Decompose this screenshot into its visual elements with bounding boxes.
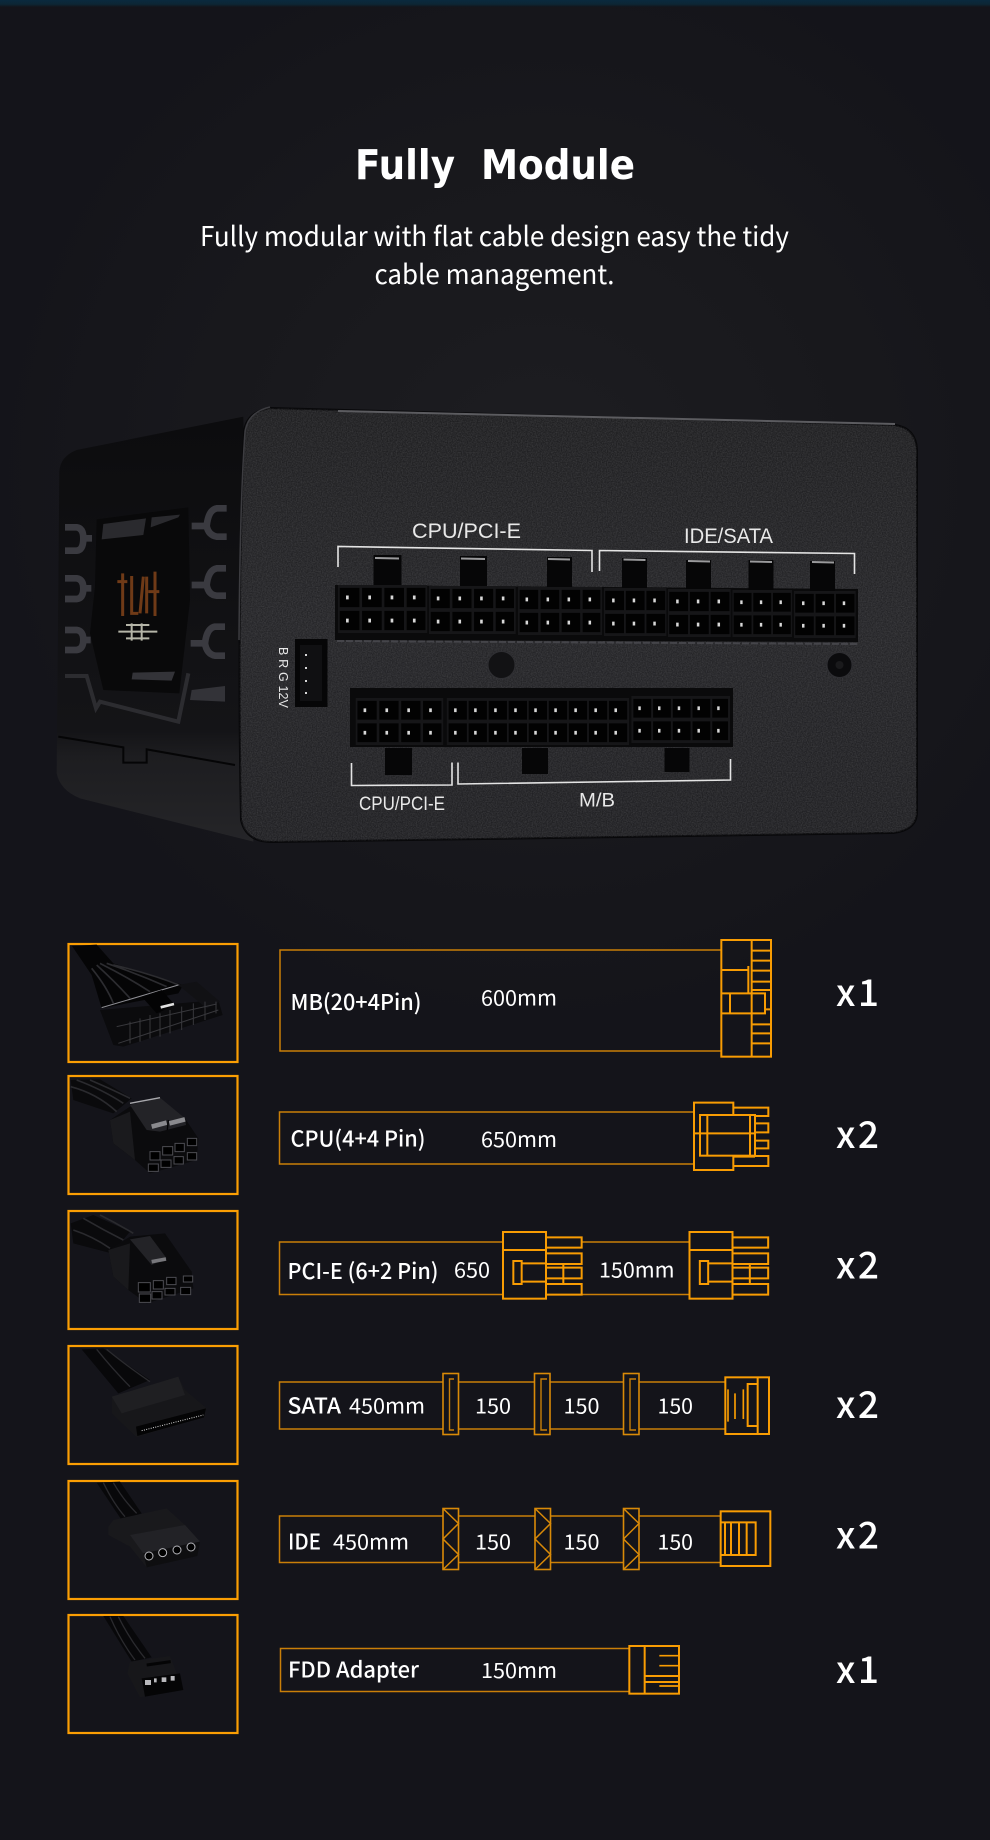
quantity: x 2 bbox=[836, 1506, 879, 1560]
quantity: x 1 bbox=[836, 1640, 879, 1694]
connector clip two bbox=[534, 1374, 550, 1434]
subtitle text: Fully modular with flat cable design easy the tidy bbox=[200, 215, 789, 254]
label: PCI-E (6+2 Pin) bbox=[288, 1254, 438, 1286]
cable outline bbox=[280, 1112, 693, 1164]
length: 450mm bbox=[333, 1526, 409, 1556]
cable outline bbox=[280, 1516, 721, 1562]
icon: product logo mark bbox=[117, 572, 159, 641]
label: M/B: M/B bbox=[579, 790, 615, 812]
length: first segment: 650 bbox=[454, 1254, 490, 1284]
thumbnail: IDE connector bbox=[68, 1481, 238, 1599]
connector clip one bbox=[443, 1374, 458, 1434]
top bracket lines bbox=[338, 546, 854, 574]
label: SATA bbox=[288, 1388, 341, 1420]
connector clip three bbox=[624, 1374, 639, 1434]
length: second segment: 150mm bbox=[599, 1254, 674, 1284]
icon: 6+2-pin connector one bbox=[503, 1232, 582, 1299]
cable outline bbox=[280, 950, 721, 1051]
label: B R G 12V: B R G 12V bbox=[276, 647, 290, 709]
row: CPU cable bbox=[68, 1076, 879, 1194]
icon: 8-pin connector bbox=[694, 1103, 768, 1170]
row: FDD adapter bbox=[68, 1615, 879, 1733]
connector clip one bbox=[443, 1508, 458, 1570]
label: MB(20+4Pin) bbox=[290, 985, 422, 1017]
length segment three: 150 bbox=[658, 1526, 693, 1556]
label: IDE/SATA: IDE/SATA bbox=[684, 525, 773, 548]
thumbnail: SATA connector bbox=[68, 1346, 238, 1464]
length segment two: 150 bbox=[564, 1526, 600, 1556]
icon: Molex end connector bbox=[721, 1511, 770, 1566]
cable outline bbox=[280, 1242, 689, 1294]
length segment one: 150 bbox=[475, 1526, 511, 1556]
label: CPU(4+4 Pin) bbox=[290, 1122, 426, 1154]
length segment one: 150 bbox=[475, 1390, 511, 1420]
thumbnail: MB connector bbox=[68, 944, 238, 1062]
label: IDE bbox=[288, 1524, 321, 1556]
quantity: x 2 bbox=[836, 1236, 879, 1290]
quantity: x 2 bbox=[836, 1105, 879, 1159]
product: power supply unit bbox=[57, 405, 920, 845]
subtitle text bbox=[200, 215, 789, 292]
bottom bracket lines bbox=[352, 759, 730, 786]
row: SATA cable bbox=[68, 1346, 879, 1464]
icon: FDD end connector bbox=[629, 1646, 679, 1694]
title: Fully Module bbox=[355, 141, 635, 189]
cable outline bbox=[280, 1382, 725, 1429]
side panel of PSU bbox=[57, 417, 253, 842]
RGB header bbox=[295, 639, 328, 707]
connector clip three bbox=[624, 1508, 639, 1570]
length: 650mm bbox=[481, 1124, 557, 1154]
length: 600mm bbox=[481, 982, 557, 1012]
row: MB cable bbox=[68, 940, 879, 1062]
front panel of PSU bbox=[236, 405, 920, 845]
quantity: x 2 bbox=[836, 1375, 879, 1429]
bottom connector row bbox=[350, 688, 733, 775]
background glow bbox=[0, 0, 990, 1040]
top connector row bbox=[335, 555, 858, 644]
thumbnail: PCI-E connector bbox=[68, 1211, 238, 1329]
label: CPU/PCI-E top: CPU/PCI-E bbox=[412, 520, 521, 543]
length: 450mm bbox=[349, 1390, 425, 1420]
length: 150mm bbox=[481, 1655, 557, 1685]
label: CPU/PCI-E bottom: CPU/PCI-E bbox=[359, 793, 445, 815]
connector clip two bbox=[535, 1508, 550, 1570]
quantity: x 1 bbox=[836, 963, 879, 1017]
cable outline bbox=[280, 1648, 629, 1692]
length segment three: 150 bbox=[658, 1390, 693, 1420]
row: PCI-E cable bbox=[68, 1211, 879, 1329]
icon: 6+2-pin connector two bbox=[689, 1232, 768, 1299]
length segment two: 150 bbox=[564, 1390, 600, 1420]
label: FDD Adapter bbox=[288, 1652, 420, 1684]
thumbnail: CPU connector bbox=[68, 1076, 238, 1194]
thumbnail: FDD connector bbox=[68, 1615, 238, 1733]
screw holes bbox=[488, 652, 852, 678]
icon: 24-pin connector bbox=[721, 940, 771, 1057]
subtitle text: cable management. bbox=[374, 253, 614, 292]
icon: SATA end connector bbox=[725, 1377, 769, 1434]
top edge bar bbox=[0, 0, 990, 7]
row: IDE cable bbox=[68, 1481, 879, 1599]
